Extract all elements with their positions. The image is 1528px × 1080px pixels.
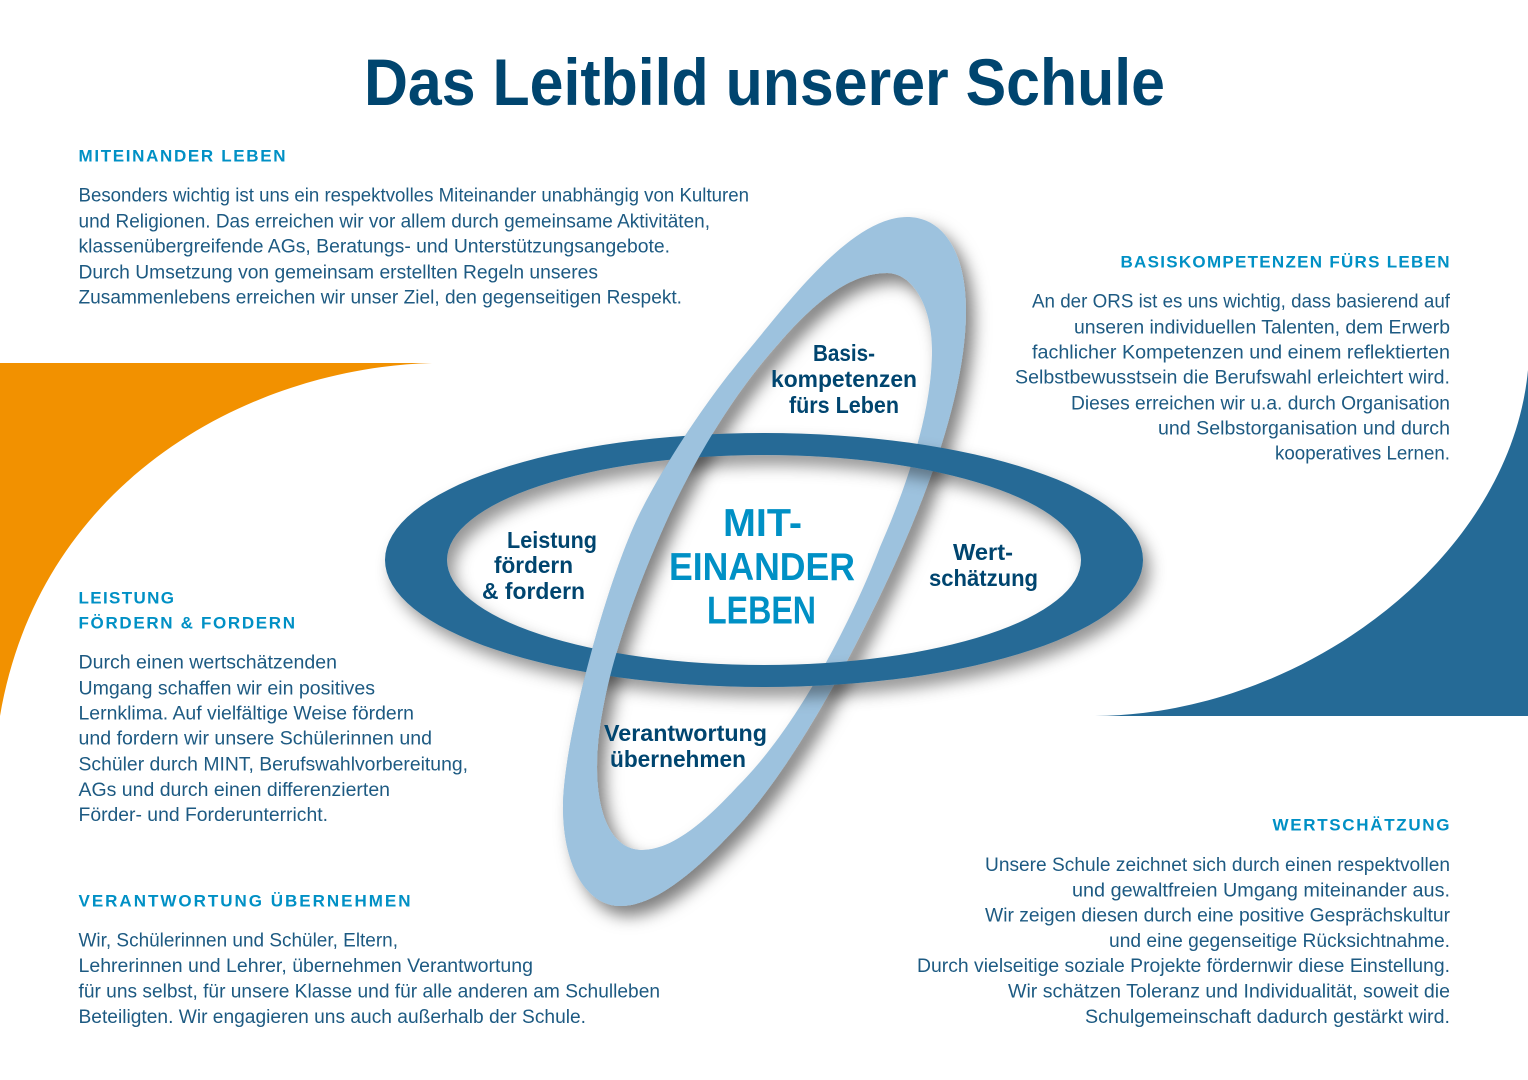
- text block: Basiskompetenzen: kooperatives Lernen.: [1275, 444, 1450, 465]
- label: Wertschätzung: [929, 539, 1038, 591]
- text block: Miteinander leben: und Religionen. Das erreichen wir vor allem durch gemeinsame Aktivitäten,: [78, 212, 710, 233]
- center label: LEBEN: [707, 590, 816, 632]
- label: Leistung fördern: fördern: [494, 552, 573, 578]
- panel: Verantwortung übernehmen: [78, 892, 660, 1028]
- heading: Miteinander leben: MITEINANDER LEBEN: [78, 146, 286, 166]
- light blue ring overlap on left side: [563, 373, 730, 906]
- label: Verantwortung übernehmen: übernehmen: [610, 746, 746, 772]
- orange corner shape: [0, 363, 432, 716]
- text block: Leistung fördern und fordern: AGs und durch einen differenzierten: [78, 780, 390, 801]
- text block: Wertschätzung: Unsere Schule zeichnet sich durch einen respektvollen: [985, 855, 1450, 876]
- text block: Basiskompetenzen: [1015, 292, 1451, 465]
- panel: Basiskompetenzen fürs Leben: [1015, 252, 1451, 465]
- text block: Basiskompetenzen: Dieses erreichen wir u.a. durch Organisation: [1071, 394, 1450, 415]
- diagram: interlocked rings: [385, 217, 1143, 906]
- label: Leistung fördern: Leistung: [507, 527, 597, 553]
- text block: Wertschätzung: [917, 855, 1451, 1028]
- label: Basiskompetenzen: fürs Leben: [789, 392, 899, 418]
- text block: Basiskompetenzen: fachlicher Kompetenzen und einem reflektierten: [1032, 343, 1450, 364]
- label: Wertschätzung: Wert-: [953, 539, 1013, 565]
- label: Basiskompetenzen: [771, 340, 917, 418]
- text block: Wertschätzung: und gewaltfreien Umgang miteinander aus.: [1072, 881, 1450, 902]
- text block: Basiskompetenzen: und Selbstorganisation und durch: [1158, 419, 1450, 440]
- heading: Wertschätzung: WERTSCHÄTZUNG: [1272, 816, 1450, 834]
- text block: Leistung fördern und fordern: Förder- und Forderunterricht.: [78, 805, 328, 826]
- heading: Basiskompetenzen: BASISKOMPETENZEN FÜRS LEBEN: [1120, 252, 1450, 272]
- text block: Verantwortung übernehmen: für uns selbst, für unsere Klasse und für alle anderen am Schulleben: [78, 982, 660, 1003]
- label: Wertschätzung: schätzung: [929, 565, 1038, 591]
- label: Verantwortung übernehmen: [604, 720, 767, 772]
- text block: Wertschätzung: Wir zeigen diesen durch eine positive Gesprächskultur: [985, 906, 1451, 927]
- light blue ring: [563, 217, 966, 906]
- text block: Leistung fördern und fordern: Lernklima. Auf vielfältige Weise fördern: [78, 704, 414, 725]
- text block: Miteinander leben: [78, 186, 749, 309]
- label: Basiskompetenzen: kompetenzen: [771, 366, 917, 392]
- text block: Verantwortung übernehmen: Lehrerinnen und Lehrer, übernehmen Verantwortung: [78, 956, 533, 977]
- text block: Leistung fördern und fordern: Umgang schaffen wir ein positives: [78, 679, 375, 700]
- heading: Leistung fördern und fordern: LEISTUNG: [78, 588, 174, 608]
- panel: Leistung fördern und fordern: [78, 588, 468, 826]
- center label: MIT-: [723, 502, 802, 545]
- text block: Miteinander leben: Durch Umsetzung von gemeinsam erstellten Regeln unseres: [78, 263, 598, 284]
- text block: Leistung fördern und fordern: [78, 653, 468, 826]
- label: Verantwortung übernehmen: Verantwortung: [604, 720, 767, 746]
- text block: Basiskompetenzen: An der ORS ist es uns wichtig, dass basierend auf: [1032, 292, 1451, 313]
- text block: Verantwortung übernehmen: Beteiligten. Wir engagieren uns auch außerhalb der Schule.: [78, 1007, 586, 1028]
- text block: Verantwortung übernehmen: [78, 931, 660, 1028]
- center label: [669, 502, 855, 632]
- panel: Wertschätzung: [917, 816, 1451, 1028]
- title: Das Leitbild unserer Schule: [364, 46, 1165, 119]
- blue corner shape: [1095, 370, 1528, 716]
- text block: Miteinander leben: Zusammenlebens erreichen wir unser Ziel, den gegenseitigen Respekt.: [78, 288, 682, 309]
- text block: Verantwortung übernehmen: Wir, Schülerinnen und Schüler, Eltern,: [78, 931, 398, 952]
- text block: Basiskompetenzen: unseren individuellen Talenten, dem Erwerb: [1074, 318, 1450, 339]
- text block: Miteinander leben: klassenübergreifende AGs, Beratungs- und Unterstützungsangebote.: [78, 237, 670, 258]
- text block: Miteinander leben: Besonders wichtig ist uns ein respektvolles Miteinander unabhängig von Kulturen: [78, 186, 749, 207]
- text block: Wertschätzung: Wir schätzen Toleranz und Individualität, soweit die: [1008, 982, 1450, 1003]
- center label: EINANDER: [669, 546, 855, 589]
- panel: Miteinander leben: [78, 146, 749, 309]
- label: Leistung fördern: & fordern: [482, 578, 585, 604]
- text block: Leistung fördern und fordern: und fordern wir unsere Schülerinnen und: [78, 729, 432, 750]
- label: Basiskompetenzen: Basis-: [813, 340, 875, 366]
- text block: Wertschätzung: Schulgemeinschaft dadurch gestärkt wird.: [1085, 1007, 1450, 1028]
- heading: Leistung fördern und fordern: [78, 588, 295, 632]
- dark blue ring: [385, 433, 1143, 687]
- heading: Verantwortung übernehmen: VERANTWORTUNG ÜBERNEHMEN: [78, 892, 410, 910]
- text block: Basiskompetenzen: Selbstbewusstsein die Berufswahl erleichtert wird.: [1015, 368, 1450, 389]
- text block: Wertschätzung: und eine gegenseitige Rücksichtnahme.: [1109, 931, 1450, 952]
- heading: Leistung fördern und fordern: FÖRDERN & FORDERN: [78, 614, 295, 632]
- text block: Leistung fördern und fordern: Durch einen wertschätzenden: [78, 653, 337, 674]
- text block: Wertschätzung: Durch vielseitige soziale Projekte fördernwir diese Einstellung.: [917, 956, 1450, 977]
- label: Leistung fördern: [482, 527, 597, 604]
- text block: Leistung fördern und fordern: Schüler durch MINT, Berufswahlvorbereitung,: [78, 755, 468, 776]
